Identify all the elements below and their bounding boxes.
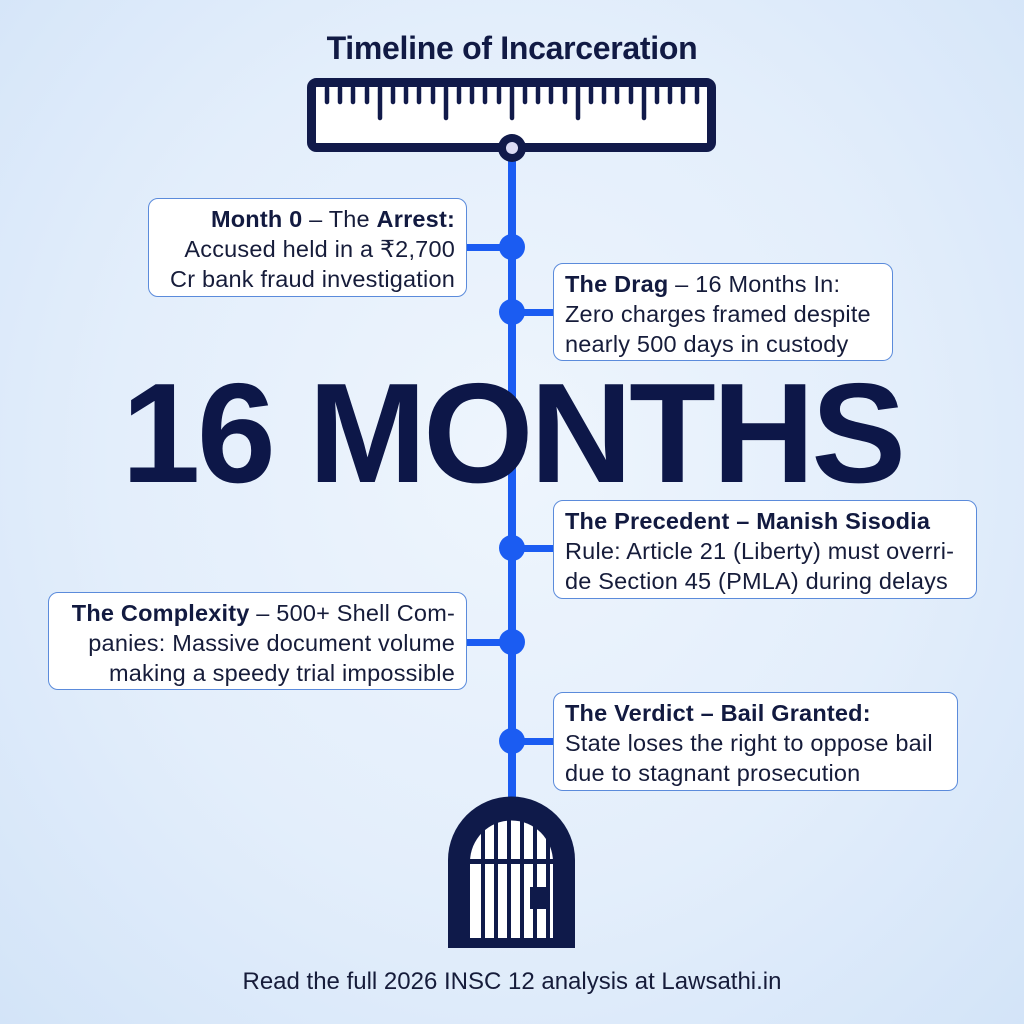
callout: the verdict: State loses the right to oppose bail	[565, 730, 933, 756]
callout: the precedent: The Precedent – Manish Sisodia	[565, 508, 930, 534]
callout: the drag	[553, 263, 893, 361]
title: Timeline of Incarceration	[327, 30, 697, 66]
callout: the precedent: Rule: Article 21 (Liberty) must overri-	[565, 538, 954, 564]
big number: 16 MONTHS: 16 MONTHS	[121, 354, 903, 513]
callout: the precedent: de Section 45 (PMLA) during delays	[565, 568, 948, 594]
callout: month 0 arrest: Accused held in a ₹2,700	[184, 236, 455, 262]
callout: the complexity: making a speedy trial impossible	[109, 660, 455, 686]
callout: the drag: nearly 500 days in custody	[565, 331, 848, 357]
callout: the drag: The Drag – 16 Months In:	[565, 271, 840, 297]
callout: month 0 arrest	[148, 198, 467, 297]
callout: the precedent	[553, 500, 977, 599]
callout: the complexity	[48, 592, 467, 690]
icon: prison gate	[448, 797, 575, 948]
callout: the drag: Zero charges framed despite	[565, 301, 871, 327]
timeline line	[508, 150, 516, 800]
callout: month 0 arrest: Month 0 – The Arrest:	[211, 206, 455, 232]
callout: the verdict: The Verdict – Bail Granted:	[565, 700, 871, 726]
callout: the complexity: The Complexity – 500+ Shell Com-	[72, 600, 455, 626]
callout: the verdict: due to stagnant prosecution	[565, 760, 860, 786]
callout: the verdict	[553, 692, 958, 791]
footer: Read the full 2026 INSC 12 analysis at Lawsathi.in	[242, 968, 781, 995]
connectors and dots	[466, 234, 554, 754]
icon: ruler	[312, 82, 712, 162]
callout: the complexity: panies: Massive document volume	[88, 630, 455, 656]
callout: month 0 arrest: Cr bank fraud investigation	[170, 266, 455, 292]
